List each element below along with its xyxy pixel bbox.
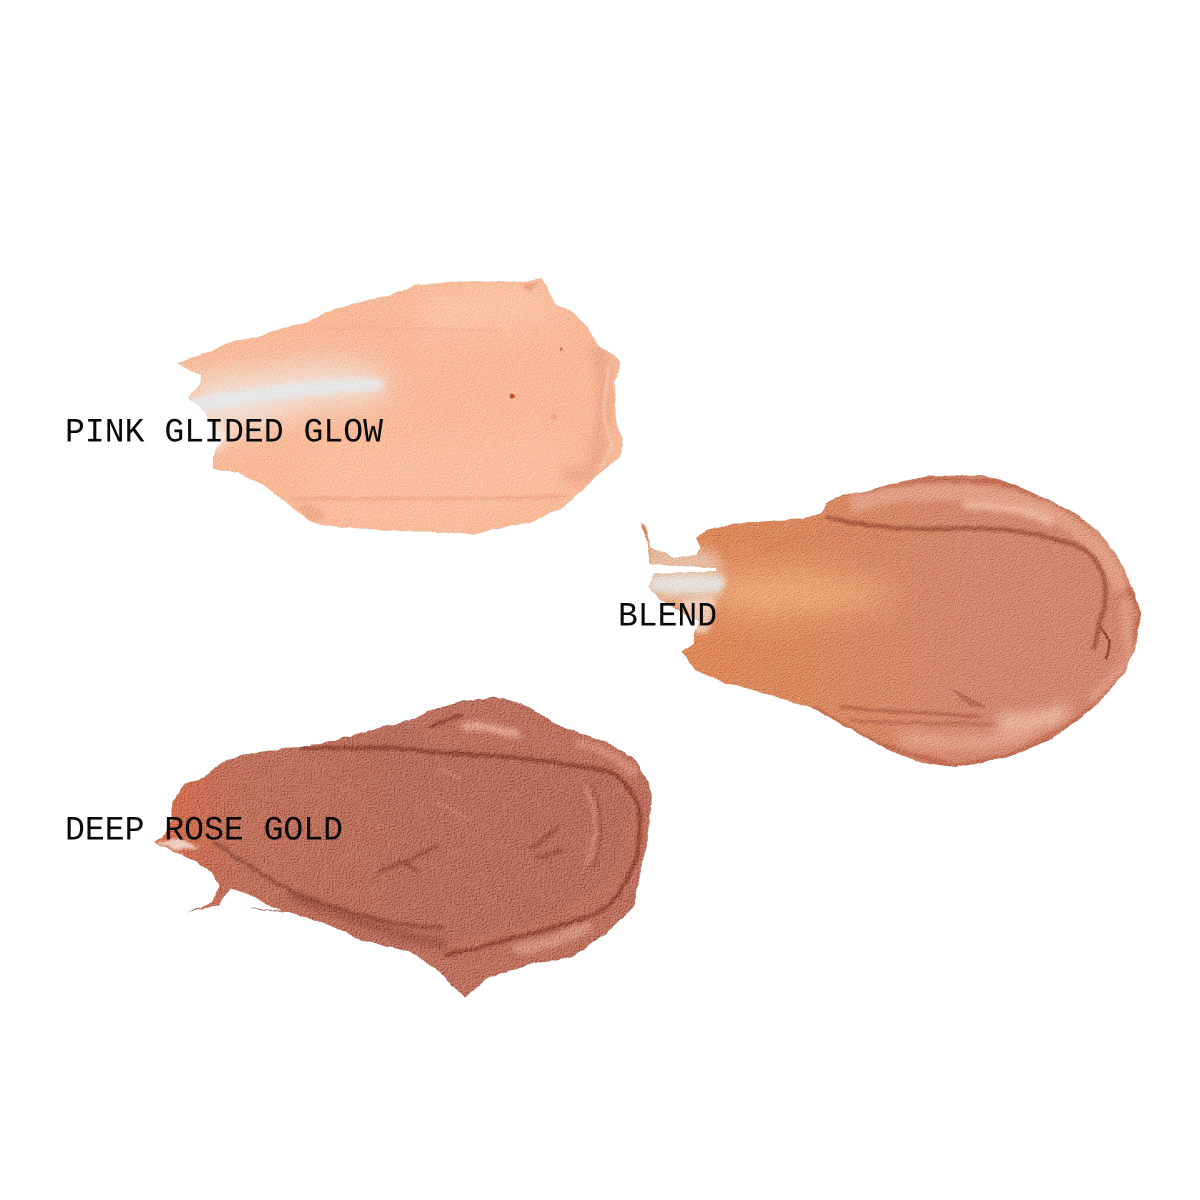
swatch infographic (68, 278, 1141, 998)
label: blend: BLEND (618, 598, 717, 636)
label: pink glided glow: PINK GLIDED GLOW (65, 414, 384, 452)
swatch: pink glided glow (177, 278, 623, 534)
swatch: deep rose gold (154, 697, 652, 997)
swatch: blend (641, 475, 1141, 767)
label: deep rose gold: DEEP ROSE GOLD (65, 812, 343, 850)
